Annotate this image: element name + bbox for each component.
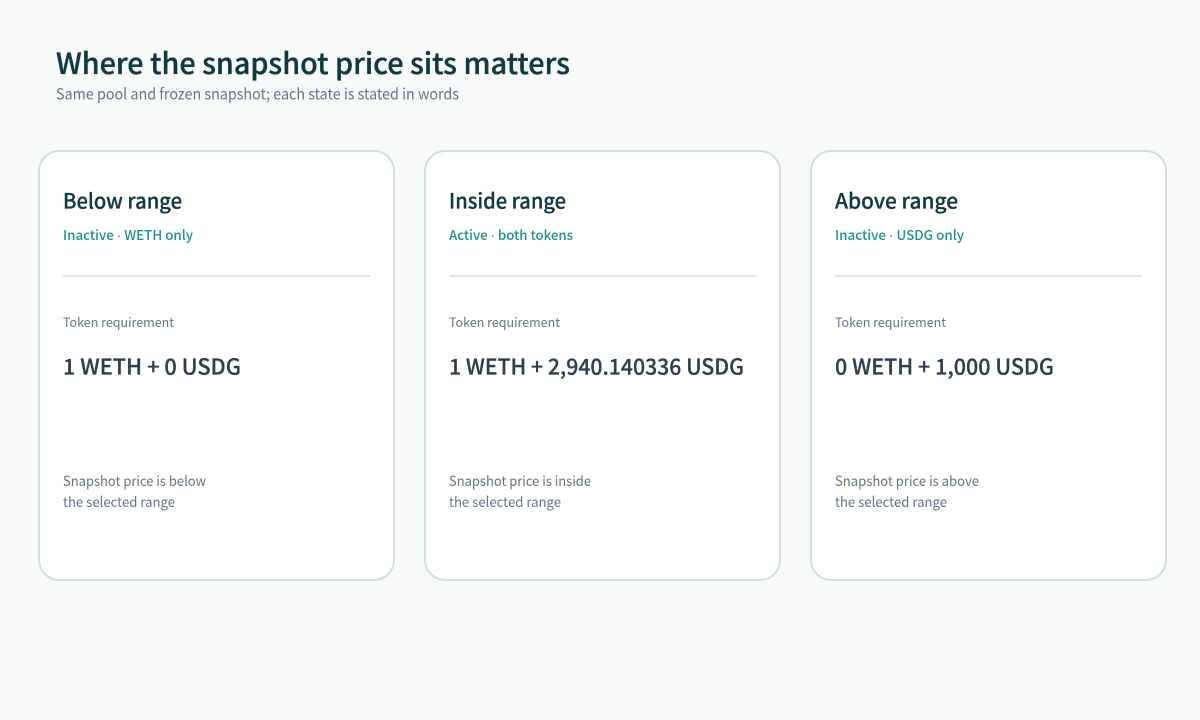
note: price position: the selected range bbox=[835, 492, 947, 512]
note: price position: the selected range bbox=[449, 492, 561, 512]
value: token amounts: 1 WETH + 0 USDG bbox=[63, 350, 241, 382]
status: inside range: Active · both tokens bbox=[449, 224, 573, 244]
value: token amounts: 1 WETH + 2,940.140336 USDG bbox=[449, 350, 744, 382]
label: token requirement: Token requirement bbox=[63, 312, 174, 331]
value: token amounts: 0 WETH + 1,000 USDG bbox=[835, 350, 1054, 382]
note: price position bbox=[63, 471, 206, 512]
note: price position: Snapshot price is inside bbox=[449, 471, 591, 491]
note: price position bbox=[835, 471, 979, 512]
panel: inside range bbox=[425, 151, 780, 580]
subtitle: Same pool and frozen snapshot; each state is stated in words bbox=[56, 82, 459, 104]
heading: below range: Below range bbox=[63, 186, 182, 216]
note: price position: the selected range bbox=[63, 492, 175, 512]
heading: inside range: Inside range bbox=[449, 186, 566, 216]
status: above range: Inactive · USDG only bbox=[835, 224, 965, 244]
label: token requirement: Token requirement bbox=[449, 312, 560, 331]
note: price position bbox=[449, 471, 591, 512]
title: Where the snapshot price sits matters bbox=[56, 41, 570, 83]
panel: above range bbox=[811, 151, 1166, 580]
note: price position: Snapshot price is above bbox=[835, 471, 979, 491]
panel: below range bbox=[39, 151, 394, 580]
status: below range: Inactive · WETH only bbox=[63, 224, 194, 244]
note: price position: Snapshot price is below bbox=[63, 471, 206, 491]
heading: above range: Above range bbox=[835, 186, 958, 216]
label: token requirement: Token requirement bbox=[835, 312, 946, 331]
